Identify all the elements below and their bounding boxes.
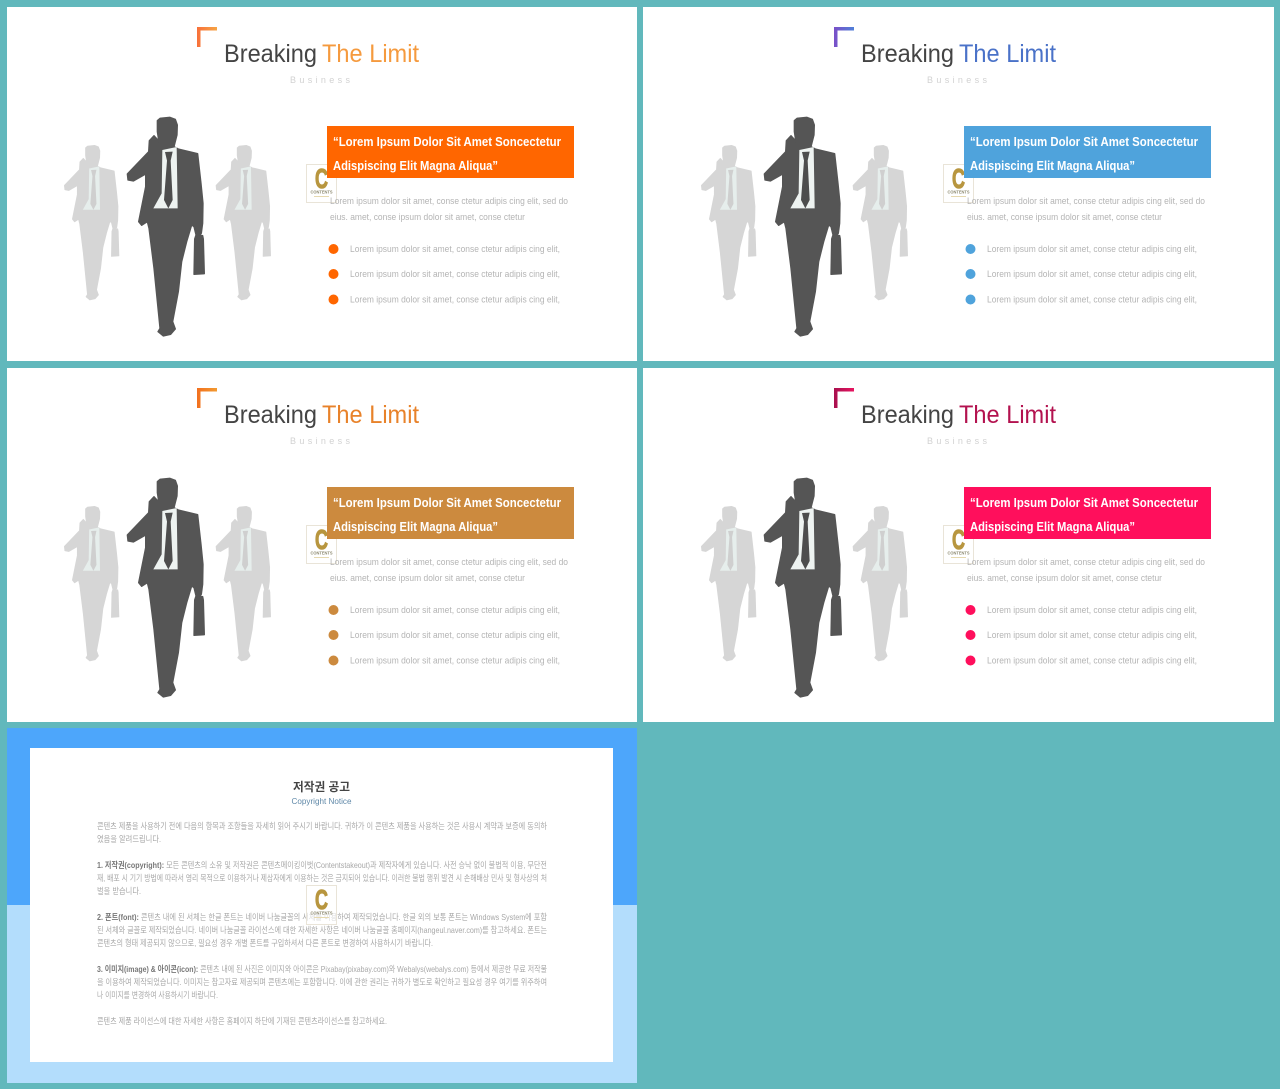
watermark: CONTENTS bbox=[310, 550, 332, 556]
heading box bbox=[327, 126, 574, 178]
paragraph bbox=[330, 557, 568, 584]
title: Breaking bbox=[224, 40, 317, 68]
subtitle: Business bbox=[290, 75, 350, 85]
title: The Limit bbox=[322, 40, 419, 68]
watermark: C bbox=[952, 163, 965, 194]
intro text: 였음을 알려드립니다. bbox=[97, 834, 161, 844]
heading box: “Lorem Ipsum Dolor Sit Amet Soncectetur bbox=[970, 134, 1198, 149]
panel: slide 3 tan bbox=[7, 368, 637, 722]
heading: 저작권 공고 bbox=[293, 779, 350, 794]
heading box bbox=[327, 487, 574, 539]
bullet list bbox=[966, 244, 1197, 306]
heading box: Adispiscing Elit Magna Aliqua” bbox=[970, 158, 1135, 173]
paragraph: Lorem ipsum dolor sit amet, conse ctetur adipis cing elit, sed do bbox=[330, 557, 568, 568]
title: Breaking bbox=[861, 401, 954, 429]
title bbox=[224, 40, 419, 68]
bullet list: Lorem ipsum dolor sit amet, conse ctetur adipis cing elit, bbox=[350, 244, 560, 255]
section: copyright: 재, 배포 시 기기 방법에 따라서 영리 목적으로 이용하거나 제삼자에게 이용하는 것은 금지되어 있습니다. 이러한 불법 행위 발견 시 손해배상 민사 및 형사상의 처 bbox=[97, 873, 547, 883]
watermark: C bbox=[315, 884, 328, 915]
watermark: CONTENTS bbox=[310, 910, 332, 916]
section: copyright: 벌을 받습니다. bbox=[97, 886, 141, 896]
bullet list: Lorem ipsum dolor sit amet, conse ctetur adipis cing elit, bbox=[987, 269, 1197, 280]
silhouette group bbox=[701, 478, 907, 697]
heading box: “Lorem Ipsum Dolor Sit Amet Soncectetur bbox=[333, 495, 561, 510]
panel: slide 1 orange bbox=[7, 7, 637, 361]
paragraph: eius. amet, conse ipsum dolor sit amet, conse ctetur bbox=[967, 212, 1162, 223]
title: Breaking bbox=[224, 401, 317, 429]
section: copyright: 1. 저작권(copyright): 모든 콘텐츠의 소유 및 저작권은 콘텐츠메이킹이벗(Contentstakeout)과 제작자에게 있습니다. 사전 승낙 없이 불법적 이용, 무단전 bbox=[97, 860, 547, 870]
watermark bbox=[306, 163, 336, 202]
bullet list: Lorem ipsum dolor sit amet, conse ctetur adipis cing elit, bbox=[987, 656, 1197, 666]
icon: corner bracket bbox=[197, 27, 217, 47]
section: font: 2. 폰트(font): 콘텐츠 내에 된 서체는 한글 폰트는 네이버 나눔글꼴의 서체를 이용하여 제작되었습니다. 한글 외의 보통 폰트는 Windows System에 포함 bbox=[97, 912, 547, 922]
subtitle: Business bbox=[927, 75, 988, 85]
bullet list: Lorem ipsum dolor sit amet, conse ctetur adipis cing elit, bbox=[987, 244, 1197, 255]
section: font: 콘텐츠의 형태 제공되지 않으므로, 필요성 경우 개별 폰트를 구입하셔서 다른 폰트로 변경하여 사용하시기 바랍니다. bbox=[97, 938, 433, 948]
section: image and icon: 3. 이미지(image) & 아이콘(icon): 콘텐츠 내에 된 사진은 이미지와 아이콘은 Pixabay(pixabay.com)와 Webalys(webalys.com) 등에서 제공한 무료 저작물 bbox=[97, 964, 547, 974]
title: The Limit bbox=[959, 401, 1056, 429]
watermark bbox=[306, 524, 336, 564]
paragraph: eius. amet, conse ipsum dolor sit amet, conse ctetur bbox=[967, 573, 1162, 584]
watermark: CONTENTS bbox=[948, 550, 970, 556]
bullet list bbox=[966, 605, 1197, 666]
bullet list: Lorem ipsum dolor sit amet, conse ctetur adipis cing elit, bbox=[987, 630, 1197, 641]
watermark bbox=[944, 163, 974, 202]
title: Breaking bbox=[861, 40, 954, 68]
watermark: CONTENTS bbox=[310, 190, 332, 194]
heading box: Adispiscing Elit Magna Aliqua” bbox=[333, 519, 498, 534]
section: image and icon: 을 이용하여 제작되었습니다. 이미지는 참고자료 제공되며 콘텐츠에는 포함합니다. 이에 관한 권리는 귀하가 별도로 확인하고 필요성 경우 여기를 위주하여 bbox=[97, 977, 547, 987]
silhouette group bbox=[64, 117, 270, 336]
section: image and icon bbox=[97, 964, 547, 1000]
watermark: CONTENTS bbox=[948, 190, 970, 194]
subtitle: Business bbox=[927, 436, 988, 446]
paragraph: eius. amet, conse ipsum dolor sit amet, conse ctetur bbox=[330, 573, 525, 584]
silhouette group bbox=[64, 478, 270, 697]
title bbox=[861, 401, 1056, 429]
paragraph: eius. amet, conse ipsum dolor sit amet, conse ctetur bbox=[330, 212, 525, 223]
subtitle: Business bbox=[290, 436, 350, 446]
section: font bbox=[97, 912, 547, 948]
paragraph: Lorem ipsum dolor sit amet, conse ctetur adipis cing elit, sed do bbox=[967, 557, 1205, 568]
watermark bbox=[306, 884, 336, 924]
section: font: 된 서체와 글꼴로 제작되었습니다. 네이버 나눔글꼴 라이선스에 대한 자세한 사항은 네이버 나눔글꼴 홈페이지(hangeul.naver.com)를 참고하세요. 폰트는 bbox=[97, 925, 547, 935]
bullet list: Lorem ipsum dolor sit amet, conse ctetur adipis cing elit, bbox=[350, 605, 560, 616]
paragraph: Lorem ipsum dolor sit amet, conse ctetur adipis cing elit, sed do bbox=[967, 196, 1205, 207]
title: The Limit bbox=[959, 40, 1056, 68]
closing line: 콘텐츠 제품 라이선스에 대한 자세한 사항은 홈페이지 하단에 기재된 콘텐츠라이선스를 참고하세요. bbox=[97, 1016, 387, 1026]
paragraph: Lorem ipsum dolor sit amet, conse ctetur adipis cing elit, sed do bbox=[330, 196, 568, 207]
bullet list: Lorem ipsum dolor sit amet, conse ctetur adipis cing elit, bbox=[987, 605, 1197, 616]
paragraph bbox=[967, 557, 1205, 584]
heading box bbox=[964, 487, 1211, 539]
heading box: “Lorem Ipsum Dolor Sit Amet Soncectetur bbox=[333, 134, 561, 149]
heading box: Adispiscing Elit Magna Aliqua” bbox=[333, 158, 498, 173]
section: image and icon: 나 이미지를 변경하여 사용하시기 바랍니다. bbox=[97, 990, 218, 1000]
section: copyright bbox=[97, 860, 547, 896]
bullet list bbox=[328, 605, 560, 666]
title: The Limit bbox=[322, 401, 419, 429]
panel: slide 2 blue bbox=[643, 7, 1274, 361]
panel: slide 4 pink bbox=[643, 368, 1274, 722]
icon: corner bracket bbox=[834, 27, 854, 47]
bullet list bbox=[328, 244, 560, 306]
watermark bbox=[944, 524, 974, 564]
panel: copyright notice bbox=[7, 728, 637, 1083]
bullet list: Lorem ipsum dolor sit amet, conse ctetur adipis cing elit, bbox=[350, 294, 560, 306]
silhouette group bbox=[701, 117, 907, 336]
intro text: 콘텐츠 제품을 사용하기 전에 다음의 항목과 조항들을 자세히 읽어 주시기 바랍니다. 귀하가 이 콘텐츠 제품을 사용하는 것은 사용시 계약과 보증에 동의하 bbox=[97, 821, 547, 831]
bullet list: Lorem ipsum dolor sit amet, conse ctetur adipis cing elit, bbox=[350, 269, 560, 280]
heading box bbox=[964, 126, 1211, 178]
watermark: C bbox=[952, 524, 965, 555]
title bbox=[861, 40, 1056, 68]
subheading: Copyright Notice bbox=[292, 796, 352, 806]
paragraph bbox=[330, 196, 568, 223]
paragraph bbox=[967, 196, 1205, 223]
heading box: Adispiscing Elit Magna Aliqua” bbox=[970, 519, 1135, 534]
icon: corner bracket bbox=[834, 388, 854, 408]
bullet list: Lorem ipsum dolor sit amet, conse ctetur adipis cing elit, bbox=[350, 630, 560, 641]
intro text bbox=[97, 821, 547, 844]
bullet list: Lorem ipsum dolor sit amet, conse ctetur adipis cing elit, bbox=[987, 294, 1197, 306]
heading box: “Lorem Ipsum Dolor Sit Amet Soncectetur bbox=[970, 495, 1198, 510]
icon: corner bracket bbox=[197, 388, 217, 408]
watermark: C bbox=[315, 163, 328, 194]
watermark: C bbox=[315, 524, 328, 555]
bullet list: Lorem ipsum dolor sit amet, conse ctetur adipis cing elit, bbox=[350, 656, 560, 666]
title bbox=[224, 401, 419, 429]
